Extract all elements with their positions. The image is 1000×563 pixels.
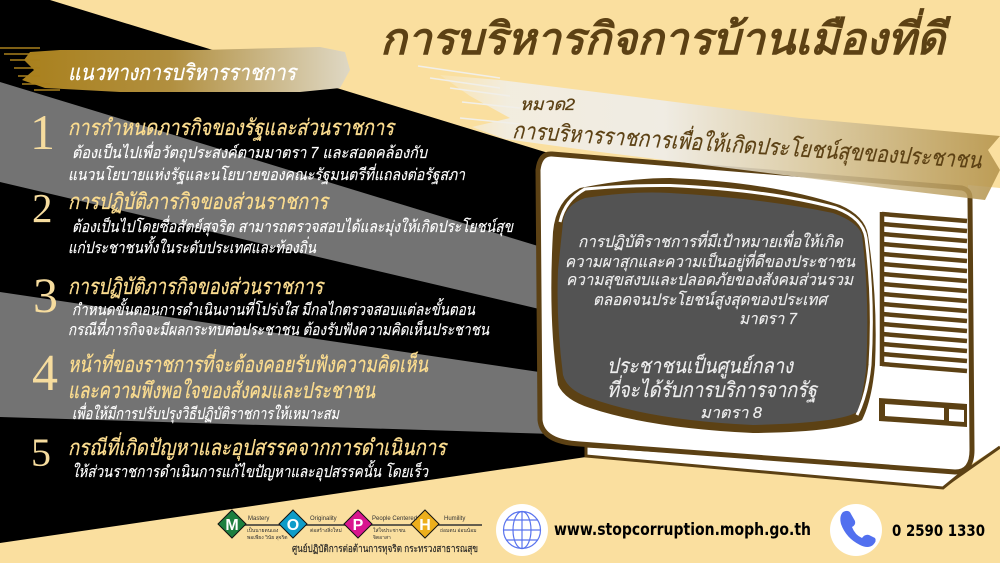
grey ray band upper <box>0 82 620 328</box>
screen text: article 8: ที่จะได้รับการบริการจากรัฐ <box>607 375 819 403</box>
MOPH logo: พอเพียง วินัย สุจริต <box>247 534 288 541</box>
banner heading: แนวทางการบริหารราชการ <box>68 60 299 85</box>
TV stand <box>586 446 965 488</box>
item 2: ต้องเป็นไปโดยซื่อสัตย์สุจริต สามารถตรวจสอบได้และมุ่งให้เกิดประโยชน์สุข <box>72 215 514 237</box>
item 5 <box>31 430 449 482</box>
MOPH logo: ถ่อมตน อ่อนน้อม <box>440 527 477 534</box>
badge O <box>279 510 307 538</box>
TV screen frame <box>551 178 876 433</box>
icon: globe <box>496 504 548 556</box>
TV grill <box>882 212 967 371</box>
black ray panel <box>0 0 620 543</box>
screen text: article 7: ความสุขสงบและปลอดภัยของสังคมส่วนรวม <box>566 272 854 290</box>
screen text: article 8 <box>607 353 819 422</box>
item 4: เพื่อให้มีการปรับปรุงวิธีปฏิบัติราชการให้เหมาะสม <box>72 402 340 424</box>
TV screen highlight <box>560 185 871 415</box>
MOPH logo: ต่อสร้างสิ่งใหม่ <box>310 527 342 534</box>
television <box>538 154 1000 488</box>
item 1: การกำหนดภารกิจของรัฐและส่วนราชการ <box>68 115 397 141</box>
item 1: แนวนโยบายแห่งรัฐและนโยบายของคณะรัฐมนตรีที่แถลงต่อรัฐสภา <box>68 163 466 185</box>
TV side edge <box>943 447 1000 487</box>
TV screen <box>558 193 867 425</box>
badge P <box>344 510 372 538</box>
item 3 <box>33 267 490 339</box>
icon: phone <box>830 504 882 556</box>
section label: หมวด2 <box>520 95 576 114</box>
item 4: หน้าที่ของราชการที่จะต้องคอยรับฟังความคิดเห็น <box>68 349 429 377</box>
logo caption: ศูนย์ปฏิบัติการต่อต้านการทุจริต กระทรวงสาธารณสุข <box>292 543 478 555</box>
badge H: H <box>419 517 431 534</box>
brush banner: section <box>418 66 1000 200</box>
item 3: การปฏิบัติภารกิจของส่วนราชการ <box>68 274 326 299</box>
screen text: article 7: การปฏิบัติราชการที่มีเป้าหมายเพื่อให้เกิด <box>578 230 845 251</box>
screen text: article 7: ตลอดจนประโยชน์สูงสุดของประเทศ <box>593 290 830 310</box>
item 4: และความพึงพอใจของสังคมและประชาชน <box>68 378 376 403</box>
brush banner: guidelines <box>0 47 350 92</box>
MOPH logo: ใส่ใจประชาชน <box>373 527 406 534</box>
screen text: article 7: ความผาสุกและความเป็นอยู่ที่ดีของประชาชน <box>565 250 856 272</box>
item 2: 2 <box>32 185 52 231</box>
item 4: 4 <box>32 345 58 402</box>
badge H <box>411 510 439 538</box>
website: www.stopcorruption.moph.go.th <box>554 520 811 540</box>
badge P: P <box>353 517 364 534</box>
item 4 <box>32 345 429 424</box>
MOPH logo <box>218 510 482 555</box>
item 3: 3 <box>33 267 58 323</box>
grey ray band lower <box>0 292 620 436</box>
MOPH logo: จิตอาสา <box>373 534 391 541</box>
item 2: การปฏิบัติภารกิจของส่วนราชการ <box>68 189 331 214</box>
badge M: M <box>225 517 239 534</box>
TV side panel <box>968 185 1000 466</box>
item 2 <box>32 185 514 257</box>
item 3: กำหนดขั้นตอนการดำเนินงานที่โปร่งใส มีกลไกตรวจสอบแต่ละขั้นตอน <box>72 298 476 319</box>
screen text: article 8: มาตรา 8 <box>700 405 762 422</box>
screen text: article 7: มาตรา 7 <box>739 311 798 328</box>
TV body <box>538 154 972 472</box>
MOPH logo: เป็นนายตนเอง <box>247 526 279 534</box>
MOPH logo: Mastery <box>248 516 269 522</box>
MOPH logo: People Centered <box>372 516 417 522</box>
item 3: กรณีที่ภารกิจจะมีผลกระทบต่อประชาชน ต้องรับฟังความคิดเห็นประชาชน <box>68 318 490 339</box>
MOPH logo: Originality <box>310 516 337 522</box>
item 5: กรณีที่เกิดปัญหาและอุปสรรคจากการดำเนินการ <box>68 432 449 461</box>
item 1: 1 <box>30 104 55 160</box>
item 5: ให้ส่วนราชการดำเนินการแก้ไขปัญหาและอุปสรรคนั้น โดยเร็ว <box>72 460 429 482</box>
screen text: article 7 <box>565 230 856 328</box>
item 1: ต้องเป็นไปเพื่อวัตถุประสงค์ตามมาตรา 7 และสอดคล้องกับ <box>72 141 429 163</box>
TV controls <box>879 398 967 427</box>
badge M <box>218 510 246 538</box>
screen text: article 8: ประชาชนเป็นศูนย์กลาง <box>607 353 795 379</box>
title: การบริหารกิจการบ้านเมืองที่ดี <box>380 8 952 64</box>
MOPH logo: Humility <box>444 516 465 522</box>
item 1 <box>30 104 466 185</box>
item 5: 5 <box>31 430 51 475</box>
badge O: O <box>287 517 299 534</box>
item 2: แก่ประชาชนทั้งในระดับประเทศและท้องถิ่น <box>68 236 317 257</box>
